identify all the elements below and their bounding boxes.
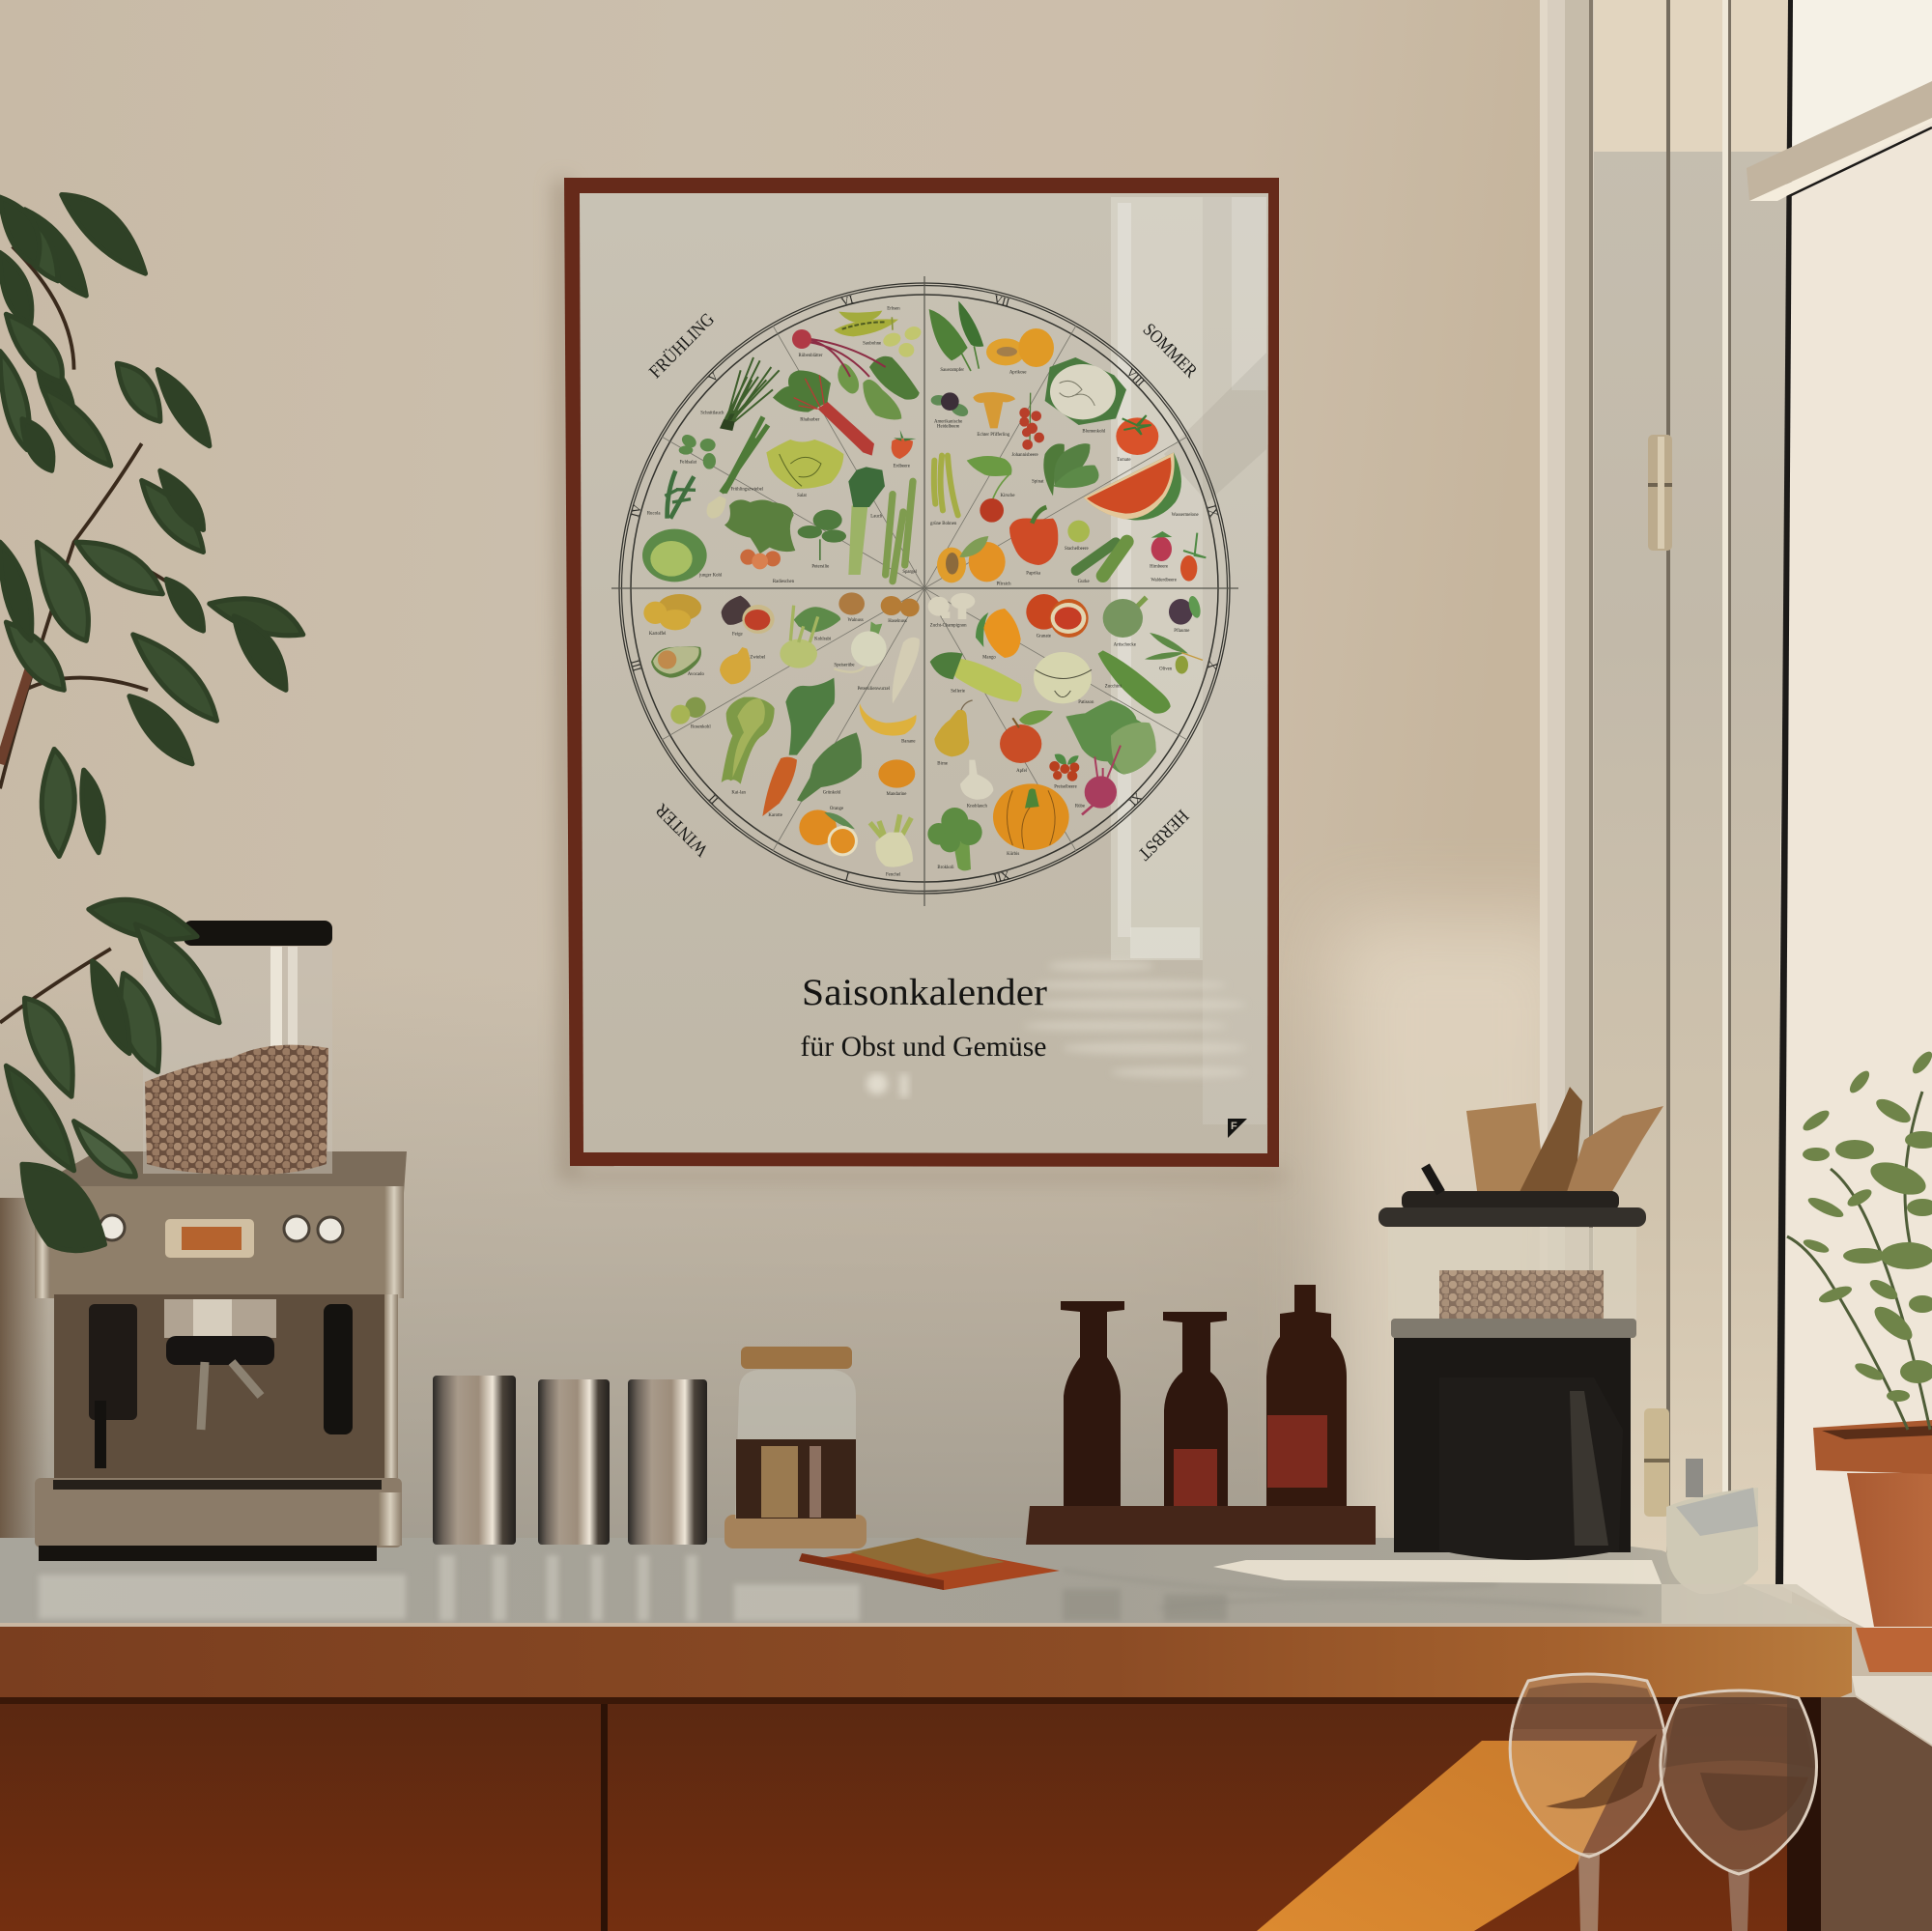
strawberry — [892, 430, 916, 469]
wild strawberry — [1151, 533, 1206, 583]
brussels sprouts — [670, 697, 711, 730]
banana — [860, 703, 917, 745]
pear: Birne — [937, 762, 948, 767]
broccoli: Brokkoli — [937, 866, 954, 870]
asparagus — [886, 481, 918, 582]
poster sheet — [580, 193, 1268, 1153]
month numerals: X — [1206, 660, 1220, 671]
bell pepper: Paprika — [1026, 571, 1041, 576]
cabinet base — [0, 1697, 1840, 1931]
pak choi — [722, 697, 775, 796]
steam wands — [89, 1304, 353, 1468]
rhubarb: Rhabarber — [800, 418, 820, 423]
bean jar — [143, 921, 332, 1175]
sunlit streak on counter — [1213, 1560, 1662, 1584]
wall background — [0, 0, 1584, 1594]
sunlight on cabinet — [1257, 1741, 1637, 1931]
season labels — [645, 309, 1201, 865]
chives — [700, 357, 780, 431]
cranberries — [1049, 754, 1079, 790]
broad beans: Saubohne — [863, 342, 881, 347]
lettuce: Salat — [797, 494, 807, 498]
apple — [1000, 710, 1053, 774]
carrot — [762, 678, 835, 818]
month numerals: IV — [628, 503, 644, 519]
spring onion: Frühlingszwiebel — [731, 488, 764, 493]
season wheel — [611, 276, 1238, 906]
season labels: HERBST — [1133, 806, 1192, 865]
plant stems — [0, 246, 197, 1023]
wine glasses — [1510, 1674, 1817, 1931]
fennel — [870, 814, 913, 877]
door hinge lower — [1644, 1408, 1669, 1517]
month numerals: VI — [839, 293, 855, 308]
orange — [799, 807, 858, 856]
season labels: FRÜHLING — [645, 309, 719, 383]
door hinge upper — [1648, 435, 1672, 551]
chanterelle — [973, 392, 1015, 438]
publisher logo — [1228, 1119, 1247, 1138]
rocket: Rucola — [647, 512, 661, 517]
peaches: Pfirsich — [996, 582, 1011, 587]
fennel: Fenchel — [886, 872, 901, 877]
month numerals: III — [628, 658, 644, 673]
zucchini: Zucchini — [1105, 684, 1122, 689]
poster frame shadow — [554, 180, 1285, 1180]
subtitle: für Obst und Gemüse — [800, 1031, 1047, 1063]
avocado: Avocado — [688, 672, 704, 677]
mango — [976, 609, 1021, 660]
beet greens — [792, 329, 920, 419]
rocket — [647, 470, 696, 519]
wild strawberry: Walderdbeere — [1151, 579, 1177, 583]
leek — [848, 467, 885, 575]
poster frame — [564, 178, 1279, 1167]
turnip — [834, 621, 887, 672]
figs: Feige — [732, 632, 743, 637]
patisson: Patisson — [1078, 700, 1094, 705]
sorrel — [929, 301, 983, 373]
month numerals: V — [705, 369, 722, 385]
wafers — [1466, 1087, 1663, 1198]
bell pepper — [1009, 507, 1058, 576]
blueberries: Heidelbeere — [937, 425, 959, 430]
beetroot — [1065, 700, 1156, 814]
peas — [834, 306, 900, 336]
plum — [1169, 595, 1203, 634]
cucumbers — [1076, 542, 1127, 584]
cauliflower: Blumenkohl — [1082, 430, 1106, 435]
strawberry: Erdbeere — [894, 464, 910, 469]
blueberries: Amerikanische — [934, 420, 962, 425]
mandarin — [878, 759, 915, 797]
gooseberry: Stachelbeere — [1065, 547, 1089, 552]
glass reflection on poster — [867, 197, 1266, 1124]
celery: Sellerie — [951, 689, 965, 694]
leek: Lauch — [870, 514, 883, 519]
bottle one — [1061, 1301, 1124, 1510]
plant leaves — [0, 195, 303, 1251]
month numerals: XI — [1126, 790, 1145, 809]
lamb's lettuce — [679, 432, 716, 469]
window glass — [1776, 0, 1932, 1661]
terracotta pot — [1813, 1420, 1932, 1672]
book on counter — [799, 1538, 1060, 1590]
young cabbage — [642, 529, 723, 582]
brussels sprouts: Rosenkohl — [691, 725, 711, 730]
radishes: Radieschen — [773, 580, 795, 584]
parsley root — [858, 638, 920, 703]
green beans — [930, 456, 958, 526]
wine glass left — [1510, 1674, 1665, 1931]
apricot — [986, 328, 1054, 375]
figs — [722, 596, 775, 637]
amber bottles on tray — [1026, 1285, 1376, 1545]
artichoke — [1103, 597, 1147, 648]
artichoke: Artischocke — [1114, 643, 1136, 648]
quadrant: autumn produce — [927, 593, 1203, 870]
beetroot: Rübe — [1075, 804, 1085, 809]
month numerals: II — [706, 792, 721, 807]
watermelon: Wassermelone — [1172, 513, 1199, 518]
pak choi: Kai-lan — [731, 791, 746, 796]
banana: Banane — [901, 740, 916, 745]
apple: Apfel — [1016, 769, 1028, 774]
hazelnuts: Haselnuss — [888, 619, 907, 624]
hazelnuts — [881, 596, 920, 624]
display — [165, 1219, 254, 1258]
onion: Zwiebel — [750, 655, 766, 660]
cherry — [967, 456, 1015, 523]
plum: Pflaume — [1174, 629, 1189, 634]
pomegranate: Granate — [1037, 635, 1051, 639]
counter top — [0, 1538, 1840, 1627]
patisson — [1034, 652, 1094, 705]
apricot: Aprikose — [1009, 370, 1027, 375]
parsley — [798, 510, 846, 569]
quadrant: spring produce — [642, 306, 923, 584]
ceramic jug — [1666, 1459, 1758, 1594]
watermelon — [1084, 452, 1199, 520]
broccoli — [927, 808, 982, 870]
green beans: grüne Bohnen — [930, 522, 957, 526]
group head — [164, 1299, 276, 1430]
pumpkin — [993, 783, 1069, 857]
mushrooms — [928, 593, 975, 628]
spring onion — [706, 417, 768, 519]
kohlrabi: Kohlrabi — [814, 638, 832, 642]
orange: Orange — [830, 807, 843, 811]
olives — [1145, 633, 1203, 674]
bottle two — [1163, 1312, 1228, 1510]
redcurrants — [1011, 393, 1044, 458]
parsley root: Petersilienwurzel — [858, 687, 891, 692]
blueberries — [931, 392, 970, 430]
pear — [934, 700, 973, 767]
drip tray — [35, 1478, 402, 1561]
zucchini — [1098, 650, 1171, 714]
bottle three — [1266, 1285, 1347, 1515]
bottle three label — [1267, 1415, 1327, 1488]
asparagus: Spargel — [902, 570, 918, 575]
raspberry — [1150, 531, 1172, 570]
lamb's lettuce: Feldsalat — [680, 461, 697, 466]
cherry: Kirsche — [1000, 494, 1015, 498]
tomato — [1116, 415, 1158, 463]
grinder — [1378, 1087, 1663, 1560]
carrot: Karotte — [768, 813, 782, 818]
potatoes: Kartoffel — [649, 632, 667, 637]
kohlrabi — [780, 606, 840, 668]
publisher logo: F — [1231, 1121, 1237, 1132]
bottle two label — [1174, 1449, 1217, 1507]
chives: Schnittlauch — [700, 412, 724, 416]
month numerals: XII — [992, 868, 1011, 885]
mango: Mango — [982, 655, 996, 660]
garlic — [960, 760, 993, 809]
wall corner below window — [1821, 1676, 1932, 1931]
pomegranate — [1026, 594, 1089, 639]
sorrel: Sauerampfer — [940, 368, 964, 373]
spinach — [1032, 443, 1098, 496]
wooden tray — [1026, 1506, 1376, 1545]
espresso machine — [34, 1151, 407, 1561]
gauges — [99, 1215, 343, 1242]
mandarin: Mandarine — [887, 792, 906, 797]
mushrooms: Zucht-Champignon — [930, 623, 967, 628]
month numerals: VII — [992, 292, 1011, 309]
potatoes — [643, 594, 701, 637]
month numerals — [628, 292, 1221, 885]
walnut — [838, 592, 865, 623]
canister glass — [1388, 1228, 1636, 1320]
gooseberry — [1065, 521, 1090, 552]
season labels: SOMMER — [1139, 320, 1201, 382]
celery — [930, 652, 1022, 702]
walnut: Walnuss — [848, 618, 864, 623]
rhubarb — [773, 370, 874, 456]
tomato: Tomate — [1117, 458, 1131, 463]
peas: Erbsen — [887, 306, 900, 311]
olives: Oliven — [1159, 667, 1173, 671]
season labels: WINTER — [651, 799, 713, 860]
beet greens: Rübenblätter — [799, 354, 823, 358]
turnip: Speiserübe — [834, 664, 855, 668]
onion — [720, 647, 766, 684]
pumpkin: Kürbis — [1007, 852, 1019, 857]
cauliflower — [1045, 357, 1126, 435]
quadrant: summer produce — [929, 301, 1206, 587]
window plant — [1787, 1048, 1932, 1430]
steel canisters — [433, 1376, 707, 1545]
radishes — [724, 499, 795, 584]
chanterelle: Echter Pfifferling — [977, 433, 1010, 438]
window frame and trim — [1540, 0, 1792, 1604]
avocado — [651, 646, 704, 678]
redcurrants: Johannisbeere — [1011, 453, 1038, 458]
quadrant: winter produce — [643, 592, 920, 877]
lettuce — [766, 440, 843, 498]
raspberry: Himbeere — [1150, 565, 1168, 570]
young cabbage: junger Kohl — [698, 573, 723, 578]
broad beans — [863, 325, 923, 357]
month numerals: IX — [1205, 503, 1221, 519]
title: Saisonkalender — [802, 972, 1047, 1013]
cucumbers: Gurke — [1078, 580, 1090, 584]
month numerals: I — [843, 869, 851, 884]
parsley: Petersilie — [811, 564, 829, 569]
month numerals: VIII — [1123, 365, 1148, 389]
cranberries: Preiselbeere — [1054, 785, 1077, 790]
plant on the left — [0, 195, 303, 1251]
glass jar — [724, 1347, 867, 1548]
garlic: Knoblauch — [967, 805, 988, 809]
spinach: Spinat — [1032, 479, 1044, 484]
kale: Grünkohl — [823, 790, 841, 795]
marble foreground right — [1662, 1584, 1852, 1624]
counter wood edge — [0, 1627, 1852, 1697]
peaches — [937, 536, 1011, 587]
transom bar — [1747, 81, 1932, 201]
wine glass right — [1661, 1690, 1817, 1931]
kale — [797, 732, 862, 802]
